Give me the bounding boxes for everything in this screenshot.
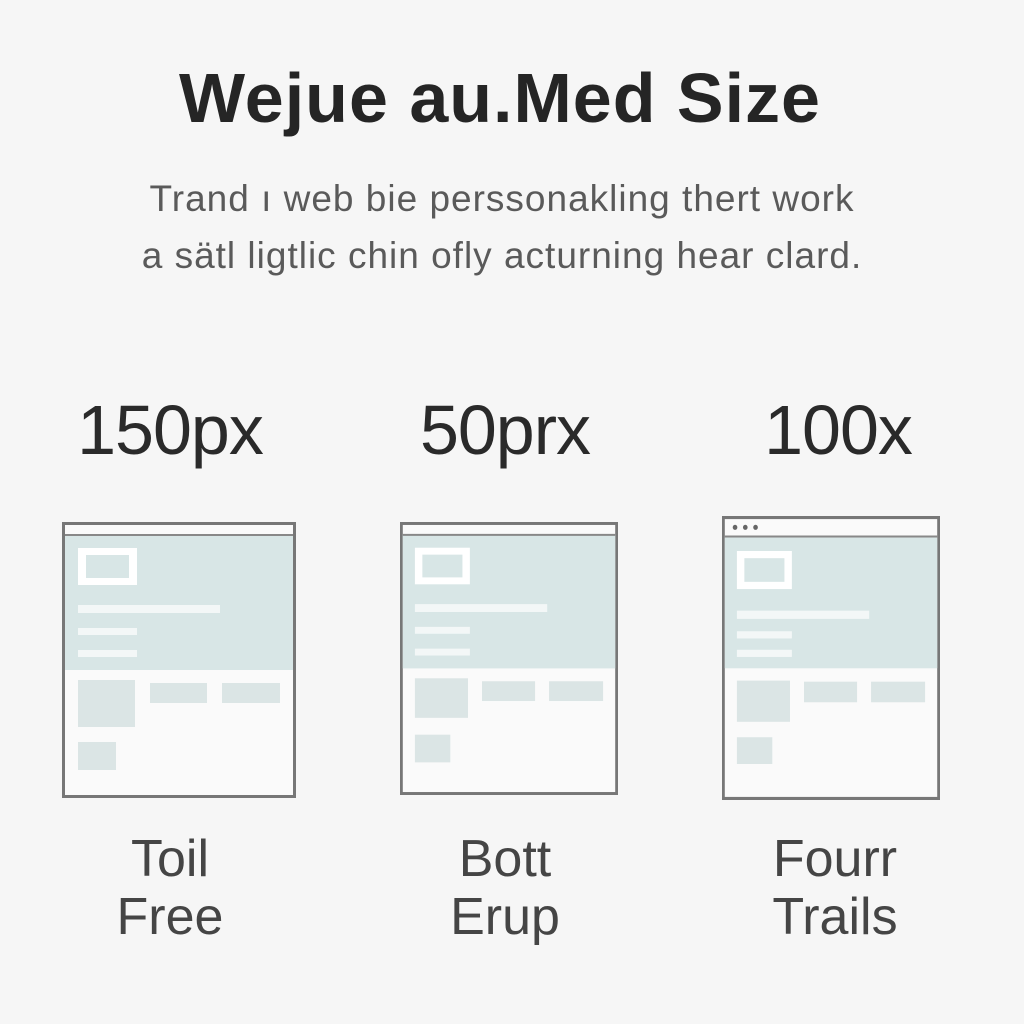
caption 1: Toil [131,830,209,888]
wireframe 1 [62,522,296,798]
caption 2: Erup [450,888,560,946]
title: Wejue au.Med Size [179,59,821,137]
size label 2: 50prx [420,391,590,469]
caption 3 [772,830,898,946]
subtitle: a sätl ligtlic chin ofly acturning hear clard. [142,235,862,276]
wireframe 2 [400,522,618,795]
subtitle [142,178,862,276]
subtitle: Trand ı web bie perssonakling thert work [150,178,854,219]
caption 1: Free [117,888,223,946]
size label 1: 150px [77,391,263,469]
size label 3: 100x [764,391,912,469]
caption 3: Fourr [773,830,897,888]
caption 3: Trails [772,888,898,946]
caption 1 [117,830,223,946]
wireframe 3 [722,516,940,800]
caption 2: Bott [459,830,551,888]
caption 2 [450,830,560,946]
